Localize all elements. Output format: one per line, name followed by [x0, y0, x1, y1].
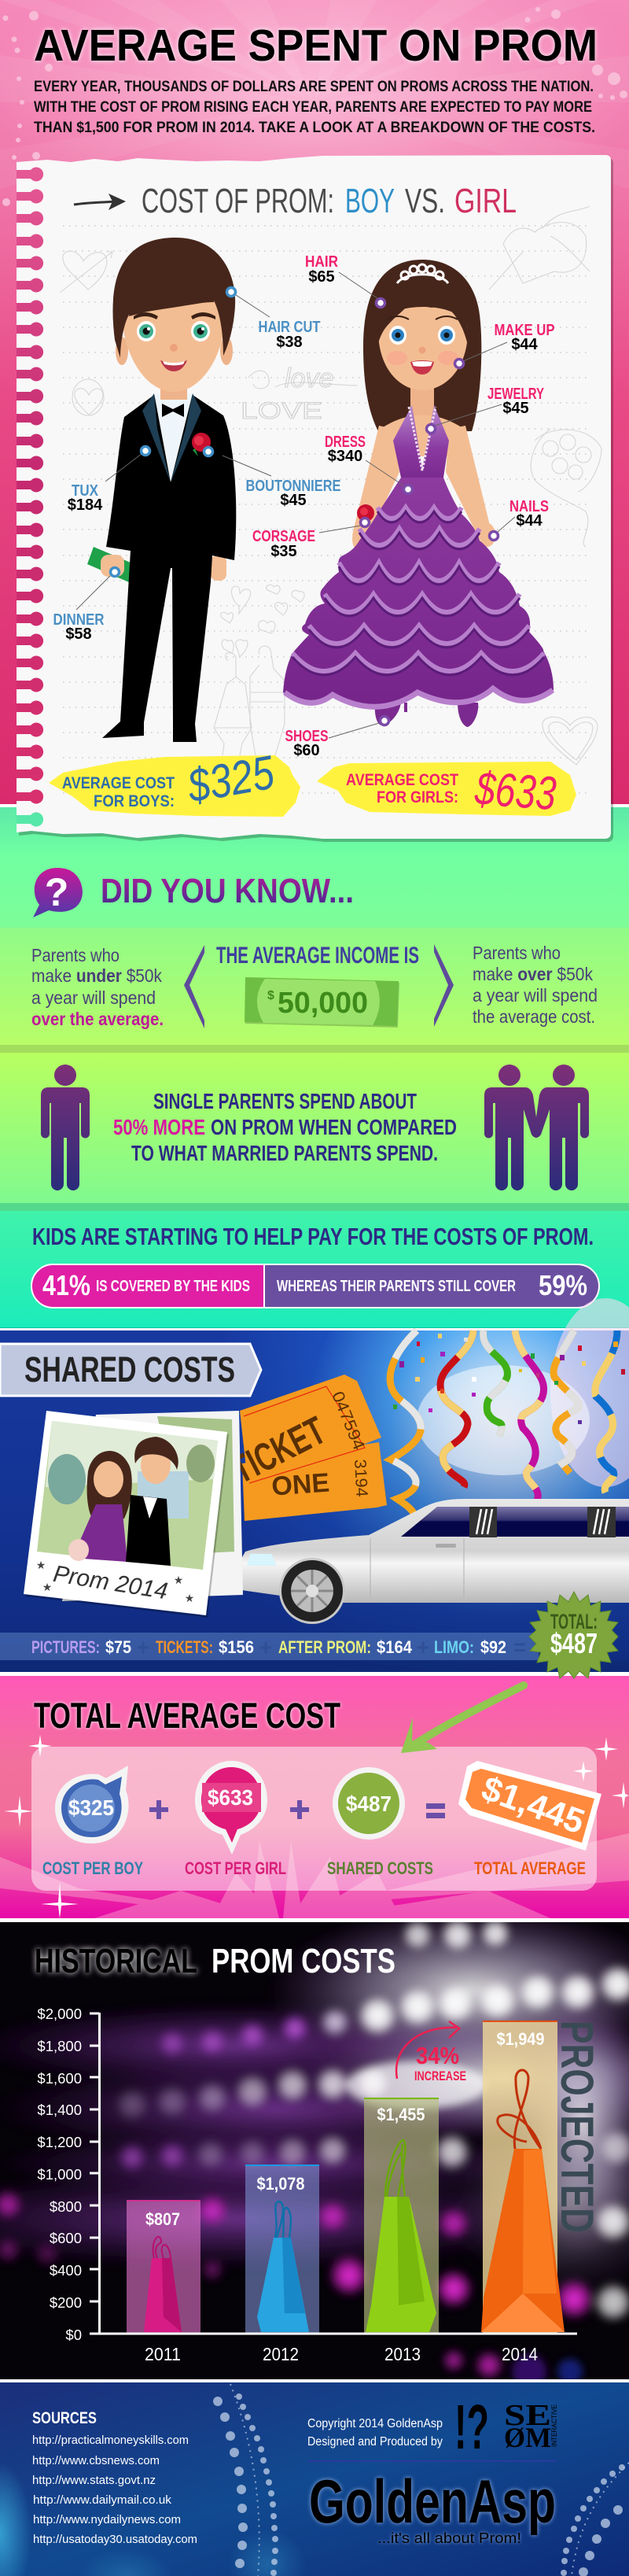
figure: girl in purple gown: [283, 260, 554, 727]
chart axes: $1,000: [37, 2166, 82, 2183]
labels: equation captions: COST PER BOY: [42, 1858, 143, 1878]
section background: did you know green: [0, 804, 629, 1328]
bar: 2012: [245, 2165, 319, 2334]
callout: average cost for boys: AVERAGE COST: [62, 774, 175, 792]
callouts: boy costs: HAIR CUT: [258, 319, 321, 336]
callouts: boy costs: DINNER: [53, 611, 105, 629]
heading: historical prom costs: [35, 1942, 395, 1980]
icon: prom photo polaroid: ★: [174, 1574, 183, 1586]
heading: cost of prom boy vs girl: BOY: [345, 182, 395, 220]
tag: total average 1445: [458, 1761, 601, 1851]
text: parents under 50k: a year will spend: [31, 987, 156, 1008]
chart axes: $400: [50, 2262, 82, 2279]
logo: seo interactive: INTERACTIVE: [550, 2404, 558, 2447]
callout: average cost for girls: FOR GIRLS:: [377, 788, 458, 806]
callouts: girl costs: CORSAGE: [252, 528, 315, 545]
text: copyright: Copyright 2014 GoldenAsp: [307, 2417, 443, 2430]
callouts: boy costs: BOUTONNIERE: [245, 478, 341, 495]
heading: cost of prom boy vs girl: VS.: [405, 182, 445, 220]
legend: shared costs sum bar: +: [137, 1635, 149, 1659]
sparkles: [4, 1735, 629, 1918]
labels: equation captions: [42, 1858, 586, 1878]
bubble: cost per boy: [55, 1766, 129, 1843]
chart axes: $200: [50, 2294, 82, 2311]
chart: kids vs parents share bar: [31, 1264, 599, 1308]
bubble: cost per girl: $633: [208, 1785, 253, 1810]
text: sources list: SOURCES: [32, 2409, 97, 2427]
icon: banknote 50000: [245, 977, 399, 1028]
icon: hand drawn arrow: [74, 194, 126, 210]
bar: 2012: $1,078: [256, 2174, 305, 2194]
callouts: girl costs: MAKE UP: [494, 322, 555, 339]
chart axes: $0: [65, 2327, 82, 2343]
heading: the average income is: THE AVERAGE INCOME IS: [216, 943, 419, 969]
doodles on paper: LOVE: [241, 398, 322, 424]
doodles on paper: love: [285, 364, 333, 393]
sub: couple in photo: [68, 1437, 178, 1566]
callout: average cost for boys: [49, 746, 300, 817]
chart axes: 2013: [384, 2344, 421, 2364]
heading: historical prom costs: PROM COSTS: [212, 1942, 395, 1980]
callouts: girl costs: $60: [293, 742, 320, 759]
logo: seo interactive: ØM: [504, 2422, 551, 2453]
chart axes: $1,800: [37, 2038, 82, 2054]
callouts: girl costs: SHOES: [285, 728, 329, 745]
logo: goldenasp: [309, 2467, 556, 2546]
section: header and pink background: [0, 0, 629, 804]
legend: shared costs sum bar: $164: [377, 1637, 413, 1657]
annotation: 34 percent increase: 34%: [416, 2042, 459, 2069]
callouts: boy costs: $38: [276, 334, 303, 351]
icon: tiara: [397, 264, 448, 283]
icon: prom photo polaroid: ★: [42, 1581, 52, 1593]
text: sources list: http://www.dailymail.co.uk: [33, 2493, 172, 2507]
annotation: 34 percent increase: INCREASE: [414, 2069, 466, 2083]
callouts: girl costs: DRESS: [325, 434, 366, 451]
chart axes: 2014: [502, 2344, 538, 2364]
text: single parents spend more: [113, 1089, 457, 1165]
callouts: boy costs: [53, 288, 341, 643]
icon: single parent: [41, 1065, 90, 1190]
sub: skirt tiers: [283, 478, 554, 707]
text: parents under 50k: make under $50k: [31, 965, 162, 986]
panel: notebook paper: [17, 155, 613, 842]
chart axes: $2,000: [37, 2006, 82, 2022]
text: parents over 50k: the average cost.: [473, 1006, 595, 1027]
callout: average cost for boys: $325: [183, 746, 278, 813]
icon: tickets: [225, 1375, 387, 1521]
icon: equals: [426, 1803, 445, 1818]
icon: money in hand: [87, 547, 131, 582]
text: sources list: http://practicalmoneyskills.com: [32, 2434, 189, 2447]
text: parents over 50k: [473, 943, 598, 1027]
legend: shared costs sum bar: $92: [480, 1637, 506, 1657]
chart: kids vs parents share bar: IS COVERED BY THE KIDS: [96, 1278, 250, 1295]
heading: did you know: DID YOU KNOW...: [101, 872, 354, 910]
chart axes: 2012: [263, 2344, 299, 2364]
star badge: total 487: [529, 1592, 618, 1678]
chart axes: $600: [50, 2230, 82, 2246]
icon: tickets: 047594: [328, 1389, 368, 1453]
bar: 2014 projected: $1,949: [497, 2029, 544, 2049]
callouts: girl costs: [252, 253, 555, 759]
bubble: shared costs: $487: [346, 1792, 392, 1816]
callout: average cost for girls: $633: [473, 762, 558, 820]
callouts: boy costs: $58: [65, 626, 92, 643]
sub: arms: [352, 426, 495, 552]
legend: shared costs sum bar: [0, 1633, 629, 1672]
icon: prom photo polaroid: [24, 1411, 243, 1618]
callouts: girl costs: $340: [328, 448, 362, 465]
text: parents under 50k: Parents who: [31, 945, 120, 965]
callouts: boy costs: $45: [280, 492, 307, 509]
legend: shared costs sum bar: +: [259, 1635, 272, 1659]
bubble: cost per girl: [195, 1761, 267, 1854]
chart axes: $1,400: [37, 2102, 82, 2118]
callouts: girl costs: $35: [270, 543, 297, 560]
callouts: girl costs: $45: [502, 400, 529, 417]
doodles on paper: [60, 206, 601, 765]
heading: historical prom costs: HISTORICAL: [35, 1942, 197, 1980]
icon: tickets: 3194: [351, 1459, 371, 1498]
text: single parents spend more: SINGLE PARENTS SPEND ABOUT: [153, 1089, 417, 1113]
callouts: girl costs: NAILS: [509, 498, 549, 515]
labels: equation captions: COST PER GIRL: [185, 1858, 286, 1878]
legend: shared costs sum bar: =: [513, 1635, 526, 1659]
heading: shared costs banner: SHARED COSTS: [24, 1349, 235, 1389]
icon: plus: [149, 1800, 168, 1819]
icon: banknote 50000: 50,000: [278, 987, 368, 1020]
labels: equation captions: SHARED COSTS: [327, 1858, 433, 1878]
decoration: streamers: [390, 1330, 617, 1526]
chart axes: $800: [50, 2198, 82, 2215]
text: single parents spend more: 50% MORE: [113, 1115, 205, 1139]
intro paragraph: THAN $1,500 FOR PROM IN 2014. TAKE A LOOK AT A BREAKDOWN OF THE COSTS.: [34, 120, 595, 136]
icon: tickets: TICKET: [225, 1408, 333, 1492]
decoration: confetti: [393, 1334, 625, 1424]
section background: shared costs blue: [0, 1298, 629, 1676]
panel: total equation card: [4, 1735, 629, 1918]
chart: kids vs parents share bar: 59%: [539, 1269, 587, 1301]
callout: average cost for girls: AVERAGE COST: [346, 771, 458, 789]
chart: kids vs parents share bar: WHEREAS THEIR PARENTS STILL COVER: [277, 1278, 516, 1295]
icon: limousine: [234, 1499, 629, 1624]
text: sources list: http://www.nydailynews.com: [33, 2513, 181, 2526]
figure: boy in tuxedo: [87, 238, 236, 742]
logo: exclamation question mark: !?: [454, 2392, 489, 2462]
chart: historical costs bars and bags: [127, 2021, 565, 2334]
text: parents under 50k: over the average.: [31, 1009, 164, 1029]
icon: boutonniere rose: [192, 433, 211, 456]
callout: average cost for girls: [317, 762, 576, 820]
legend: shared costs sum bar: LIMO:: [434, 1637, 474, 1657]
legend: shared costs sum bar: $75: [105, 1637, 131, 1657]
legend: shared costs sum bar: $156: [219, 1637, 254, 1657]
legend: shared costs sum bar: PICTURES:: [31, 1637, 100, 1657]
bar: 2014 projected: [481, 2021, 565, 2334]
text: copyright: Designed and Produced by: [307, 2435, 443, 2449]
icon: corsage rose: [357, 504, 374, 522]
label: projected: PROJECTED: [551, 2021, 602, 2233]
chart axes: $1,200: [37, 2134, 82, 2150]
callout: average cost for boys: FOR BOYS:: [94, 792, 175, 810]
icon: banknote 50000: $: [267, 989, 274, 1002]
callouts: girl costs: HAIR: [305, 253, 338, 271]
icon: prom photo polaroid: Prom 2014: [51, 1561, 170, 1604]
icon: married parents: [484, 1065, 589, 1190]
section background: historical lights: [0, 1904, 629, 2389]
text: sources list: [32, 2409, 197, 2546]
bar: 2013: $1,455: [377, 2105, 425, 2124]
tag: total average 1445: $1,445: [476, 1769, 590, 1841]
bar: 2011: [127, 2200, 200, 2334]
intro paragraph: [34, 79, 595, 136]
bar: 2013: [364, 2098, 439, 2334]
bubble: cost per boy: $325: [68, 1795, 114, 1820]
bubble: shared costs: [333, 1767, 405, 1840]
legend: shared costs sum bar: TICKETS:: [156, 1637, 213, 1657]
section background: total average cost pink: [0, 1676, 629, 1922]
logo: seo interactive: SE: [504, 2399, 551, 2432]
text: copyright: [307, 2417, 443, 2449]
chart axes: [37, 2006, 577, 2364]
divider line: [308, 2460, 556, 2462]
heading: cost of prom boy vs girl: GIRL: [454, 182, 517, 220]
icon: green arrow: [401, 1685, 524, 1753]
callouts: girl costs: JEWELRY: [487, 386, 544, 403]
labels: equation captions: TOTAL AVERAGE: [474, 1858, 586, 1878]
callouts: boy costs: $184: [68, 496, 103, 514]
icon: shoes: [375, 703, 478, 727]
callouts: girl costs: $65: [308, 268, 335, 286]
callouts: girl costs: $44: [511, 336, 539, 353]
annotation: 34 percent increase: [396, 2021, 466, 2083]
callouts: girl costs: $44: [516, 512, 543, 530]
text: parents under 50k: [31, 945, 164, 1029]
section background: footer: [0, 2379, 629, 2576]
text: sources list: http://www.cbsnews.com: [32, 2454, 160, 2467]
chart axes: 2011: [145, 2344, 181, 2364]
star badge: total 487: TOTAL:: [550, 1610, 598, 1633]
icon: question bubble: ?: [45, 870, 68, 914]
icons: chevrons: [184, 944, 454, 1028]
icon: prom photo polaroid: ★: [185, 1592, 194, 1604]
icon: plus: [290, 1800, 309, 1819]
heading: total average cost: TOTAL AVERAGE COST: [34, 1696, 340, 1736]
text: single parents spend more: ON PROM WHEN COMPARED: [211, 1115, 457, 1139]
logo: seo interactive: [504, 2399, 558, 2453]
text: sources list: http://www.stats.govt.nz: [32, 2474, 156, 2487]
text: single parents spend more: TO WHAT MARRIED PARENTS SPEND.: [131, 1141, 438, 1165]
heading: cost of prom boy vs girl: COST OF PROM:: [142, 182, 334, 220]
text: sources list: http://usatoday30.usatoday.com: [33, 2533, 197, 2546]
logo: goldenasp: GoldenAsp: [309, 2467, 556, 2536]
chart axes: $1,600: [37, 2070, 82, 2087]
bar: 2011: $807: [145, 2209, 180, 2229]
icon: question bubble: [33, 868, 83, 917]
star badge: total 487: $487: [550, 1627, 598, 1659]
icon: tickets: ONE: [270, 1468, 330, 1502]
callouts: boy costs: TUX: [72, 482, 99, 500]
logo: goldenasp: ...it's all about Prom!: [377, 2530, 521, 2546]
legend: shared costs sum bar: +: [417, 1635, 429, 1659]
icon: prom photo polaroid: ★: [36, 1559, 46, 1571]
legend: shared costs sum bar: AFTER PROM:: [278, 1637, 371, 1657]
heading: shared costs banner: [0, 1344, 261, 1396]
chart: kids vs parents share bar: 41%: [42, 1269, 90, 1301]
text: parents over 50k: make over $50k: [473, 964, 593, 984]
text: parents over 50k: Parents who: [473, 943, 561, 963]
text: parents over 50k: a year will spend: [473, 985, 598, 1006]
title: AVERAGE SPENT ON PROM: [34, 20, 598, 71]
